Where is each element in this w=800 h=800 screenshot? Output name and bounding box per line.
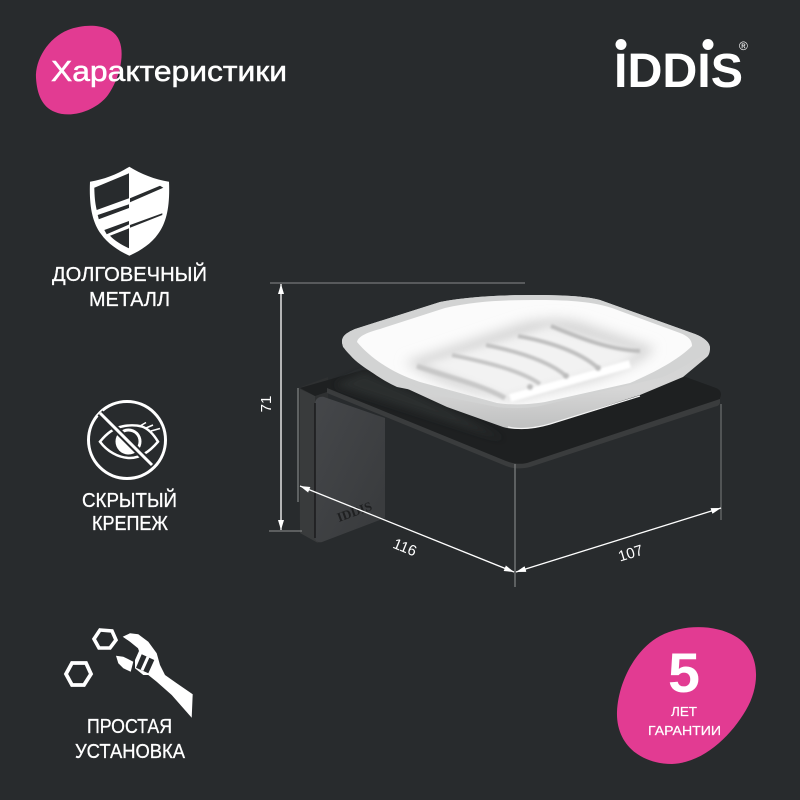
label: ЛЕТ ГАРАНТИИ: ЛЕТ — [671, 704, 697, 719]
label: ПРОСТАЯ УСТАНОВКА: УСТАНОВКА — [75, 741, 186, 763]
dimension: height 71: 71 — [258, 396, 275, 412]
icon: nuts and wrench — [66, 630, 193, 718]
dimension: width 107: 107 — [616, 542, 645, 565]
dish rim — [342, 295, 710, 408]
wall bracket — [298, 377, 385, 543]
icon: shield — [90, 167, 169, 256]
holder plate — [300, 370, 721, 468]
dish hull — [342, 295, 710, 429]
dimension: width 107 — [516, 508, 721, 572]
heading: Характеристики — [36, 26, 287, 114]
dimension lines — [258, 283, 721, 587]
icon: crossed-out eye — [88, 402, 166, 478]
label: ПРОСТАЯ УСТАНОВКА: ПРОСТАЯ — [87, 716, 172, 738]
label: СКРЫТЫЙ КРЕПЕЖ: КРЕПЕЖ — [92, 513, 168, 535]
logo: IDDIS: IDDIS — [614, 45, 743, 98]
label: ЛЕТ ГАРАНТИИ — [648, 704, 721, 738]
heading: Характеристики: Характеристики — [51, 56, 287, 88]
dish soap tray shading — [405, 319, 655, 400]
feature: easy installation — [66, 630, 193, 763]
label: ДОЛГОВЕЧНЫЙ МЕТАЛЛ: ДОЛГОВЕЧНЫЙ — [52, 262, 207, 286]
dish metal base edge — [508, 396, 640, 428]
label: ДОЛГОВЕЧНЫЙ МЕТАЛЛ: МЕТАЛЛ — [89, 289, 170, 311]
feature: hidden fastening — [82, 402, 177, 535]
dimension: depth 116: 116 — [390, 535, 419, 560]
dish ridges — [417, 326, 640, 398]
dimension: depth 116 — [300, 486, 514, 572]
bracket logo: IDDIS — [335, 498, 374, 525]
label: ПРОСТАЯ УСТАНОВКА — [75, 716, 186, 763]
label: СКРЫТЫЙ КРЕПЕЖ: СКРЫТЫЙ — [82, 488, 177, 512]
warranty badge — [617, 627, 756, 764]
logo: IDDIS: ® — [739, 39, 748, 53]
number 5: 5 — [668, 641, 700, 704]
product: soap dish on black holder — [298, 295, 721, 543]
extension lines — [270, 282, 525, 284]
feature: durable metal — [52, 167, 207, 311]
label: ЛЕТ ГАРАНТИИ: ГАРАНТИИ — [648, 723, 721, 738]
dish — [342, 295, 710, 429]
label: СКРЫТЫЙ КРЕПЕЖ — [82, 488, 177, 535]
label: ДОЛГОВЕЧНЫЙ МЕТАЛЛ — [52, 262, 207, 311]
